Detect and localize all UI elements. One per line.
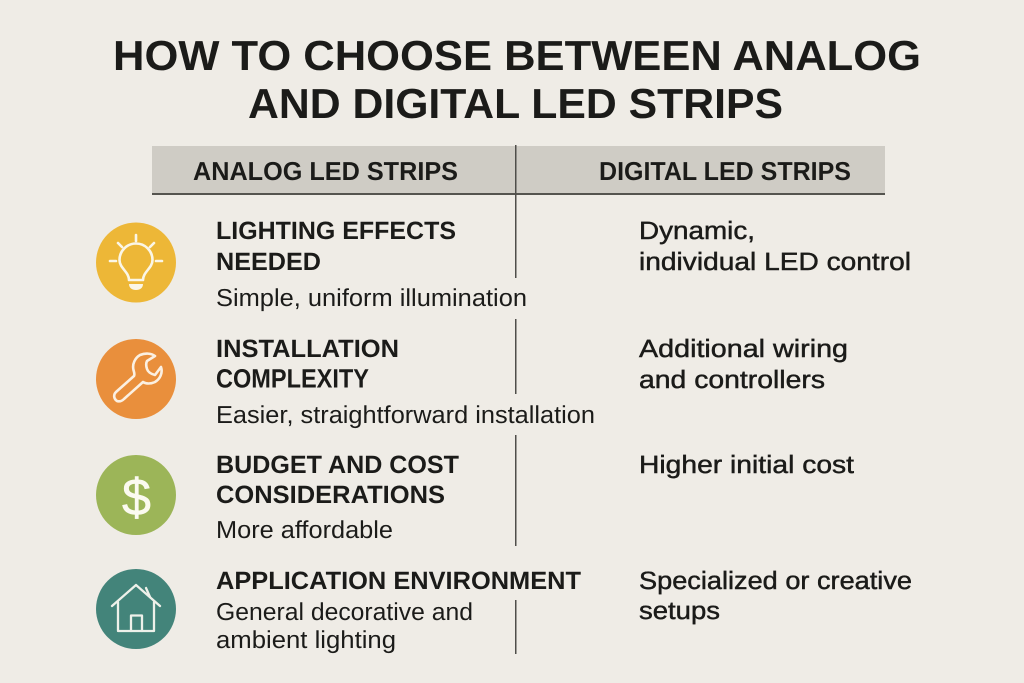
row 2: installation complexity: INSTALLATION — [216, 335, 399, 363]
row 4: application environment — [216, 567, 912, 654]
row 2: installation complexity — [216, 335, 848, 429]
row 3: budget and cost: BUDGET AND COST — [216, 451, 459, 479]
title: AND DIGITAL LED STRIPS — [248, 80, 783, 127]
row 3: budget and cost: More affordable — [216, 517, 393, 544]
row 1: lighting effects — [216, 217, 911, 312]
row 2: installation complexity: Additional wiring — [639, 335, 848, 363]
icon: light bulb — [96, 222, 176, 302]
column heading: analog: ANALOG LED STRIPS — [193, 156, 458, 186]
row 1: lighting effects: NEEDED — [216, 248, 321, 276]
row 2: installation complexity: and controllers — [639, 366, 825, 394]
column heading: digital: DIGITAL LED STRIPS — [599, 156, 851, 186]
row 4: application environment: Specialized or creative — [639, 567, 912, 595]
row 4: application environment: ambient lighting — [216, 627, 396, 654]
row 1: lighting effects: individual LED control — [639, 248, 911, 276]
row 1: lighting effects: Simple, uniform illumination — [216, 285, 527, 312]
row 2: installation complexity: Easier, straightforward installation — [216, 402, 595, 429]
title: HOW TO CHOOSE BETWEEN ANALOG — [113, 32, 921, 79]
icon: dollar sign: $ — [122, 469, 151, 527]
title — [113, 32, 921, 127]
icon: wrench — [96, 339, 176, 419]
row 4: application environment: General decorative and — [216, 599, 473, 626]
row 3: budget and cost — [216, 451, 854, 544]
row 2: installation complexity: COMPLEXITY — [216, 364, 369, 394]
table header band — [152, 146, 885, 195]
row 4: application environment: APPLICATION ENVIRONMENT — [216, 567, 581, 595]
icon: dollar sign — [96, 455, 176, 535]
row 3: budget and cost: CONSIDERATIONS — [216, 481, 445, 509]
row 1: lighting effects: Dynamic, — [639, 217, 755, 245]
row 3: budget and cost: Higher initial cost — [639, 451, 854, 479]
icon: house — [96, 569, 176, 649]
row 4: application environment: setups — [639, 597, 720, 625]
column divider — [515, 145, 516, 654]
row 1: lighting effects: LIGHTING EFFECTS — [216, 217, 456, 245]
